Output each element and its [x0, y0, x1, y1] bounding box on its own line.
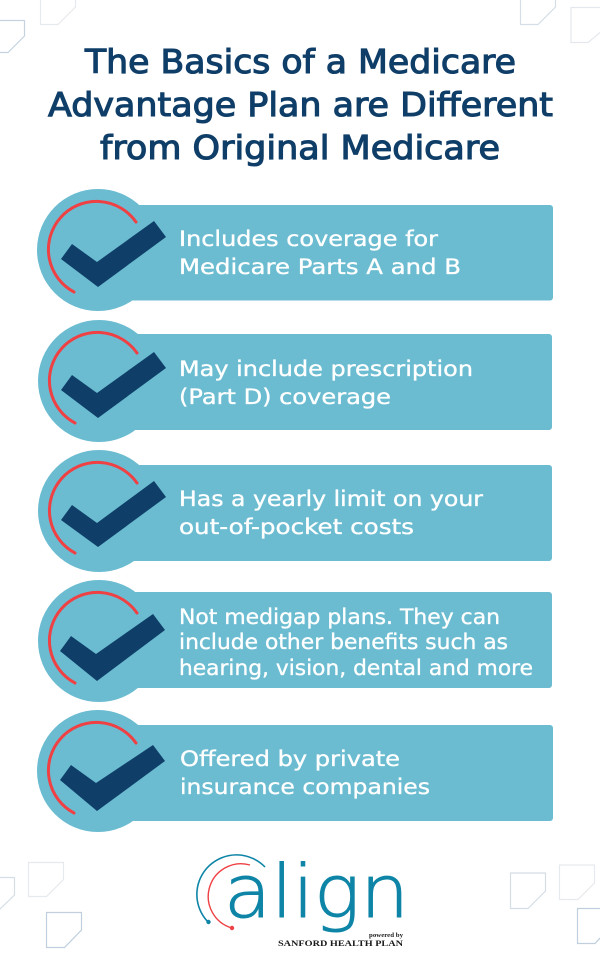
panel: yearly limit: out-of-pocket costs: [179, 515, 414, 540]
panel: private insurance companies: [37, 710, 553, 832]
panel: prescription coverage: (Part D) coverage: [179, 385, 391, 410]
panel: prescription coverage: May include prescription: [179, 357, 473, 382]
title: The Basics of a Medicare: [84, 42, 516, 81]
title: from Original Medicare: [100, 128, 500, 167]
panel: private insurance companies: Offered by private: [180, 747, 400, 772]
panel: not medigap plans: Not medigap plans. They can: [179, 605, 500, 630]
panel: prescription coverage: [38, 320, 552, 442]
panel: coverage for Parts A and B: Includes coverage for: [179, 227, 438, 252]
logo: align powered by Sanford Health Plan: align: [224, 850, 409, 935]
panel: private insurance companies: insurance companies: [180, 775, 430, 800]
panel: not medigap plans: include other benefits such as: [179, 630, 508, 655]
panel: coverage for Parts A and B: Medicare Parts A and B: [179, 255, 461, 280]
panel: not medigap plans: hearing, vision, dental and more: [179, 656, 533, 681]
panel: yearly limit: Has a yearly limit on your: [179, 487, 483, 512]
title: [48, 42, 553, 167]
panel: coverage for Parts A and B: [37, 189, 553, 311]
logo: align powered by Sanford Health Plan: powered by: [369, 932, 404, 939]
panel: not medigap plans: [38, 580, 552, 702]
title: Advantage Plan are Different: [48, 85, 553, 124]
logo: align powered by Sanford Health Plan: SANFORD HEALTH PLAN: [278, 938, 404, 948]
panel: yearly limit: [38, 450, 552, 572]
